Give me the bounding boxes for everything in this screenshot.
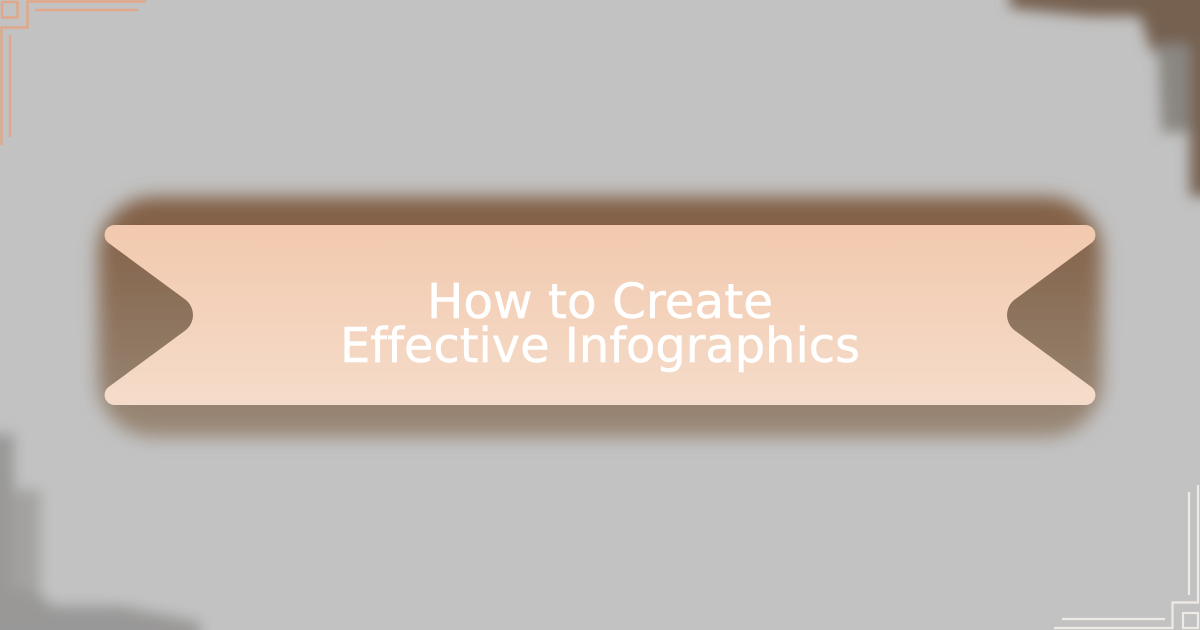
corner frame: top left <box>2 2 146 145</box>
title: Effective Infographics <box>340 318 860 374</box>
title: How to Create <box>427 274 773 330</box>
blurred shadow: top right corner <box>1010 0 1200 196</box>
ribbon banner <box>105 225 1095 405</box>
blurred shadow: bottom left corner <box>0 434 200 630</box>
ribbon shadow <box>98 197 1102 437</box>
corner frame: bottom right <box>1054 485 1198 628</box>
title <box>340 274 860 374</box>
